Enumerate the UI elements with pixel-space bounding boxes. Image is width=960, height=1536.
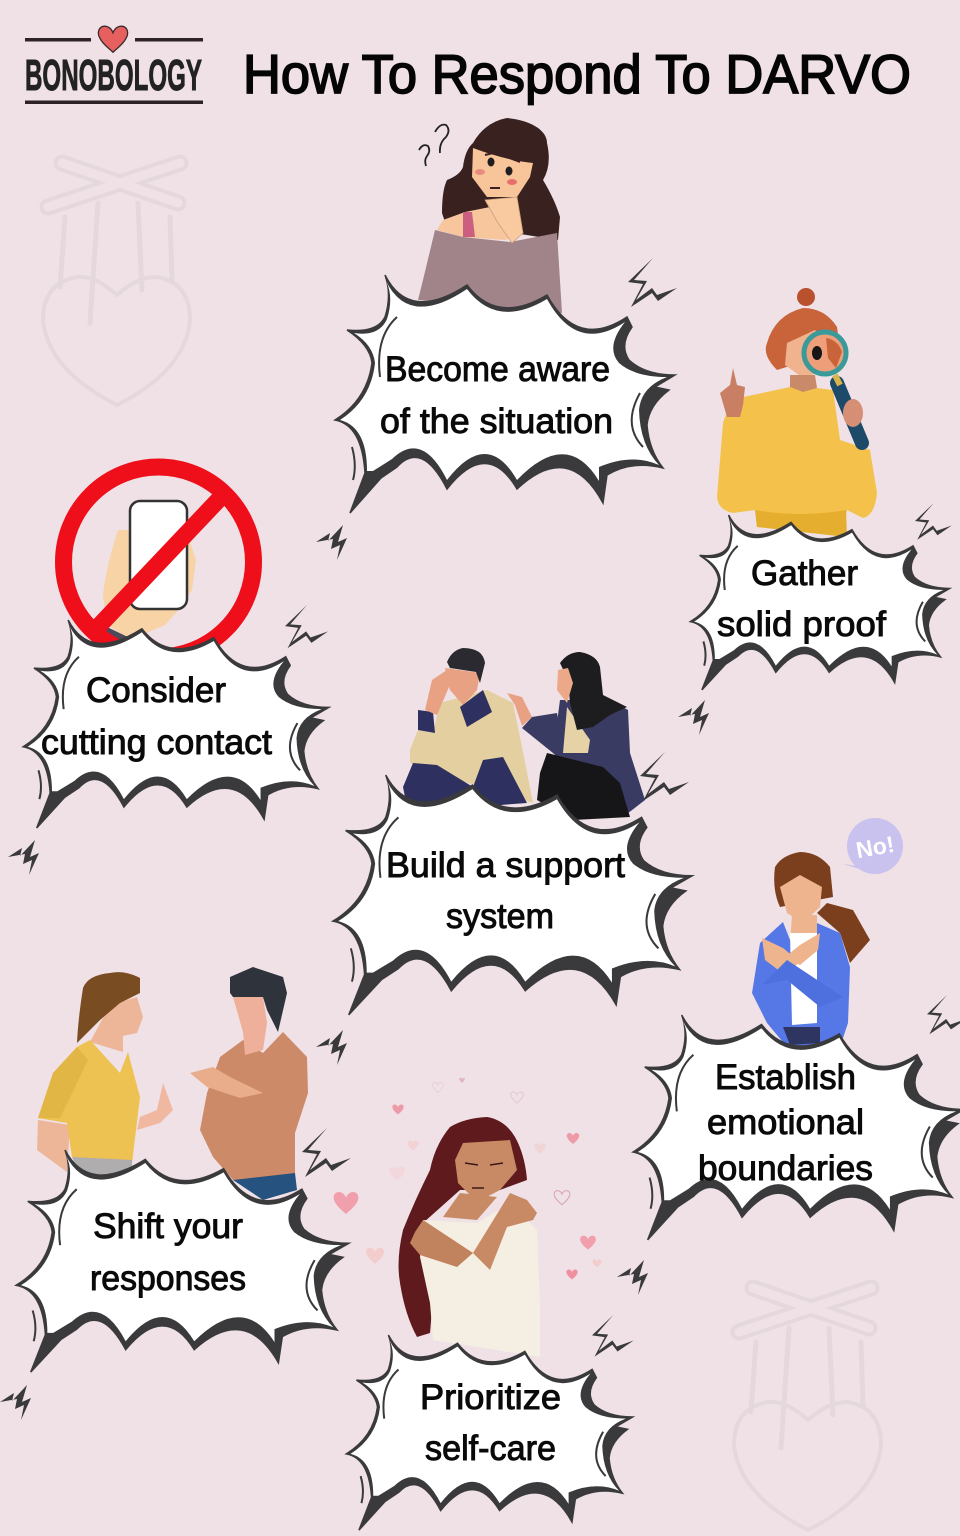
- bubble: prioritize self-care: Prioritize: [420, 1378, 561, 1417]
- figure: confused woman: [418, 118, 562, 313]
- bubble: establish emotional boundaries: boundaries: [698, 1149, 873, 1188]
- bubble: shift your responses: [16, 1150, 349, 1372]
- bubble: become aware: Become aware: [385, 350, 610, 389]
- bubble: become aware: of the situation: [380, 402, 613, 441]
- callout: No! speech bubble: No!: [854, 831, 896, 863]
- bubble: become aware: [335, 275, 675, 513]
- watermark: puppet heart bottom right: [734, 1288, 881, 1530]
- bubble: shift your responses: Shift your: [93, 1207, 243, 1246]
- icon: question marks: [419, 125, 448, 166]
- bubble: establish emotional boundaries: emotional: [707, 1103, 864, 1142]
- figure: woman with magnifying glass: [717, 288, 877, 537]
- bubble: gather solid proof: Gather: [751, 554, 858, 593]
- figure: hand with phone and prohibition sign: [64, 467, 254, 657]
- bubble: establish emotional boundaries: Establish: [715, 1058, 856, 1097]
- bubble: prioritize self-care: [346, 1335, 633, 1530]
- bubble: consider cutting contact: [23, 620, 329, 828]
- figure: two people talking: [37, 967, 308, 1200]
- bubble: consider cutting contact: Consider: [86, 671, 226, 710]
- bubble: shift your responses: responses: [90, 1259, 246, 1298]
- bubble: establish emotional boundaries: [633, 1015, 960, 1240]
- callout: No! speech bubble: [843, 818, 903, 874]
- bubble: prioritize self-care: self-care: [425, 1429, 556, 1468]
- lightning marks: [0, 258, 960, 1420]
- bubble: build a support system: Build a support: [386, 846, 625, 885]
- bubble: gather solid proof: [690, 515, 950, 690]
- figure: woman saying no: [752, 852, 870, 1047]
- bubble: consider cutting contact: cutting contact: [41, 723, 272, 762]
- bubble: gather solid proof: solid proof: [717, 605, 886, 644]
- bubble: build a support system: system: [446, 897, 554, 936]
- logo: Bonobology: [25, 26, 203, 104]
- bubble: build a support system: [333, 775, 692, 1015]
- figure: woman hugging herself with hearts: [334, 1078, 602, 1357]
- title: How To Respond To DARVO: [243, 43, 911, 105]
- figure: comforted man and friend: [403, 648, 645, 820]
- logo: Bonobology: BONOBOLOGY: [25, 51, 202, 100]
- watermark: puppet heart top left: [43, 163, 190, 405]
